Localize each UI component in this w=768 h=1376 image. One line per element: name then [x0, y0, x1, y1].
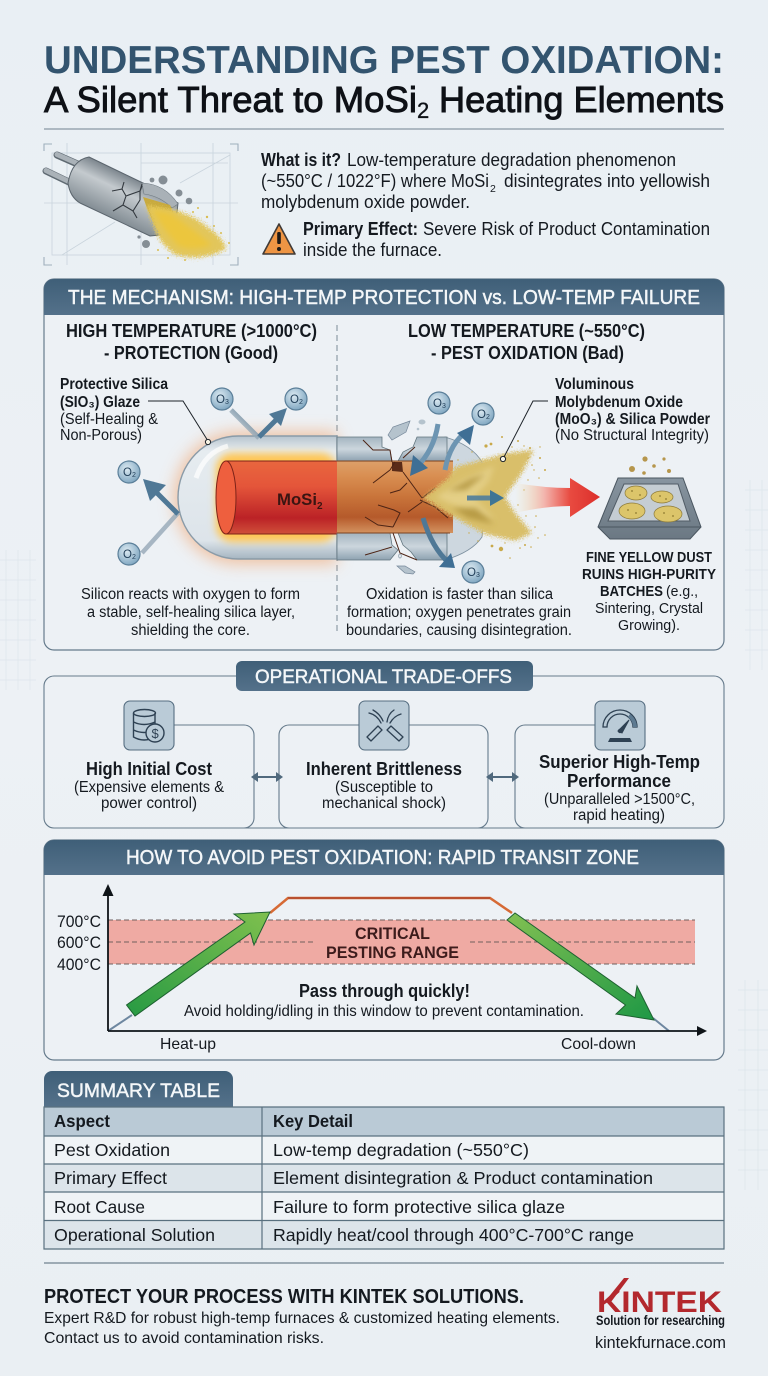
heading: high temperature: - PROTECTION (Good)	[104, 343, 278, 363]
double arrow: cost and brittleness	[251, 772, 283, 782]
chart: heating profile	[57, 884, 707, 1053]
axis temperature labels: 400°C	[57, 956, 101, 974]
callout: molybdenum oxide powder: (No Structural Integrity)	[555, 427, 709, 444]
text block: what is it: 2	[490, 183, 496, 195]
text block: yellow dust	[582, 549, 716, 634]
icon: cost	[124, 701, 174, 750]
diagram: protected MoSi2 element	[178, 436, 337, 559]
callout: protective silica glaze	[60, 376, 211, 445]
text block: what is it: Low-temperature degradation phenomenon	[347, 150, 676, 170]
oxygen molecules: 2	[299, 399, 303, 406]
table: Element disintegration & Product contamination	[273, 1168, 653, 1188]
axis temperature labels: 700°C	[57, 913, 101, 931]
logo: KINTEK	[595, 1278, 726, 1352]
arrow: contamination	[515, 478, 600, 517]
text block: silicon protection	[81, 586, 300, 639]
table: Key Detail	[273, 1111, 353, 1131]
icon: broken rods	[359, 701, 409, 750]
diagram: failing MoSi2 element	[337, 420, 486, 574]
text block: primary effect: Severe Risk of Product Contamination	[423, 219, 710, 239]
callout: molybdenum oxide powder	[500, 376, 710, 462]
text block: oxidation failure: Oxidation is faster than silica	[366, 586, 553, 603]
card: inherent brittleness: Inherent Brittleness	[306, 759, 462, 779]
text block: yellow dust: Sintering, Crystal	[595, 600, 703, 617]
footer call to action: Expert R&D for robust high-temp furnaces & customized heating elements.	[44, 1310, 560, 1327]
text block: yellow dust: RUINS HIGH-PURITY	[582, 566, 716, 583]
axes	[102, 884, 707, 1036]
critical pesting band: CRITICAL	[355, 924, 430, 943]
icon: warning triangle	[263, 224, 295, 254]
logo: KINTEK: Solution for researching	[596, 1312, 725, 1328]
oxygen molecules: 2	[486, 414, 490, 421]
oxygen molecules: O	[123, 549, 132, 561]
callout: molybdenum oxide powder: (MoO₃) & Silica Powder	[555, 411, 710, 428]
text block: what is it: disintegrates into yellowish	[504, 171, 710, 191]
card: superior performance: Performance	[567, 771, 671, 791]
panel: operational trade-offs	[44, 661, 724, 828]
temperature curve	[108, 898, 669, 1031]
summary tab: SUMMARY TABLE	[57, 1080, 220, 1102]
chart message: Pass through quickly!	[299, 981, 470, 1001]
diagram: protected MoSi2 element: 2	[317, 501, 323, 512]
axis phase labels	[160, 1036, 636, 1053]
text block: silicon protection: Silicon reacts with oxygen to form	[81, 586, 300, 603]
callout: protective silica glaze: (SIO₃) Glaze	[60, 394, 140, 411]
logo: KINTEK: KINTEK	[597, 1286, 722, 1319]
panel: summary table	[44, 1071, 724, 1249]
axis phase labels: Cool-down	[561, 1036, 636, 1053]
trade-offs heading pill	[236, 661, 533, 691]
glow around capsule	[174, 432, 337, 564]
heading: low temperature: - PEST OXIDATION (Bad)	[431, 343, 624, 363]
chart message: Avoid holding/idling in this window to prevent contamination.	[184, 1003, 584, 1020]
card: high initial cost: power control)	[101, 795, 197, 812]
chart message	[184, 981, 584, 1020]
arrow: rapid heat-up	[126, 912, 270, 1016]
card: superior performance	[515, 701, 700, 828]
oxygen arrows: failure side	[410, 424, 504, 568]
heading: high temperature: HIGH TEMPERATURE (>1000°C)	[66, 321, 317, 341]
text block: primary effect: Primary Effect:	[303, 219, 418, 239]
card: high initial cost: (Expensive elements &	[74, 779, 225, 796]
table: Pest Oxidation	[54, 1140, 170, 1160]
panel: how to avoid	[44, 840, 724, 1060]
icon: gauge	[595, 701, 645, 750]
title: A Silent Threat to MoSi	[44, 79, 417, 120]
oxygen molecules: 2	[132, 472, 136, 479]
card: high initial cost	[74, 701, 254, 828]
footer call to action: PROTECT YOUR PROCESS WITH KINTEK SOLUTIONS.	[44, 1286, 524, 1308]
card: superior performance: Superior High-Temp	[539, 752, 700, 772]
oxygen arrows: protection side	[142, 408, 287, 553]
title: UNDERSTANDING PEST OXIDATION:	[44, 39, 724, 82]
text block: silicon protection: a stable, self-healing silica layer,	[87, 604, 295, 621]
text block: yellow dust: BATCHES	[600, 583, 663, 600]
icon: cost: $	[152, 726, 160, 741]
table: Root Cause	[54, 1197, 145, 1217]
table: Rapidly heat/cool through 400°C-700°C range	[273, 1225, 634, 1245]
table	[44, 1107, 724, 1249]
oxygen molecules: O	[433, 398, 442, 410]
oxygen molecules: O	[477, 409, 486, 421]
footer call to action: Contact us to avoid contamination risks.	[44, 1330, 324, 1347]
mechanism header: THE MECHANISM: HIGH-TEMP PROTECTION vs. LOW-TEMP FAILURE	[68, 287, 700, 309]
card: high initial cost: High Initial Cost	[86, 759, 212, 779]
logo: KINTEK: kintekfurnace.com	[595, 1333, 726, 1352]
card: superior performance: (Unparalleled >1500°C,	[544, 791, 695, 808]
oxygen molecules	[118, 388, 494, 583]
card: inherent brittleness: mechanical shock)	[322, 795, 446, 812]
table: Low-temp degradation (~550°C)	[273, 1140, 529, 1160]
card: inherent brittleness: (Susceptible to	[335, 779, 433, 796]
axis temperature labels: 600°C	[57, 934, 101, 952]
trade-offs heading pill: OPERATIONAL TRADE-OFFS	[255, 667, 512, 688]
oxygen molecules: O	[123, 467, 132, 479]
text block: yellow dust: Growing).	[618, 617, 680, 634]
mechanism header	[44, 279, 724, 315]
critical pesting band	[108, 920, 695, 964]
title: 2	[417, 98, 429, 123]
text block: oxidation failure	[346, 586, 572, 639]
oxygen molecules: 3	[476, 572, 480, 579]
text block: oxidation failure: boundaries, causing disintegration.	[346, 622, 572, 639]
heading: low temperature: LOW TEMPERATURE (~550°C)	[408, 321, 645, 341]
callout: molybdenum oxide powder: Voluminous	[555, 376, 634, 393]
card: superior performance: rapid heating)	[573, 807, 665, 824]
text block: yellow dust: FINE YELLOW DUST	[586, 549, 712, 566]
axis phase labels: Heat-up	[160, 1036, 216, 1053]
callout: protective silica glaze: Non-Porous)	[60, 427, 142, 444]
text block: what is it: (~550°C / 1022°F) where MoSi	[261, 171, 489, 191]
summary tab	[44, 1071, 233, 1107]
double arrow: brittleness and performance	[486, 772, 519, 782]
illustration: disintegrating heating element	[44, 143, 238, 265]
text block: what is it: molybdenum oxide powder.	[261, 192, 470, 212]
text block: oxidation failure: formation; oxygen penetrates grain	[347, 604, 571, 621]
text block: primary effect: inside the furnace.	[303, 240, 442, 260]
icon: contaminated furnace tray	[598, 456, 701, 539]
table: Aspect	[54, 1111, 110, 1131]
callout: molybdenum oxide powder: Molybdenum Oxide	[555, 394, 683, 411]
footer call to action	[44, 1286, 560, 1347]
oxygen molecules: O	[216, 394, 225, 406]
callout: protective silica glaze: Protective Silica	[60, 376, 168, 393]
critical pesting band: PESTING RANGE	[326, 943, 459, 962]
panel: mechanism	[44, 279, 724, 650]
how-to header	[44, 840, 724, 875]
oxygen molecules: 2	[132, 554, 136, 561]
diagram: protected MoSi2 element: MoSi	[277, 490, 317, 509]
oxygen molecules: O	[290, 394, 299, 406]
text block: yellow dust: (e.g.,	[666, 583, 698, 600]
yellow powder cloud	[423, 436, 546, 559]
text block: what is it: What is it?	[261, 150, 341, 170]
table: Operational Solution	[54, 1225, 215, 1245]
title	[44, 39, 724, 123]
oxygen molecules: 3	[225, 399, 229, 406]
callout: protective silica glaze: (Self-Healing &	[60, 411, 159, 428]
text block: primary effect	[303, 219, 710, 260]
arrow: rapid cool-down	[507, 913, 654, 1020]
axis temperature labels	[57, 913, 101, 974]
heading: high temperature	[66, 321, 317, 363]
table: Primary Effect	[54, 1168, 167, 1188]
card: inherent brittleness	[279, 701, 488, 828]
oxygen molecules: O	[467, 567, 476, 579]
how-to header: HOW TO AVOID PEST OXIDATION: RAPID TRANSIT ZONE	[126, 847, 639, 869]
table: Failure to form protective silica glaze	[273, 1197, 565, 1217]
title: Heating Elements	[439, 79, 724, 120]
oxygen molecules: 3	[442, 403, 446, 410]
text block: what is it	[261, 150, 710, 212]
text block: silicon protection: shielding the core.	[131, 622, 250, 639]
heading: low temperature	[408, 321, 645, 363]
